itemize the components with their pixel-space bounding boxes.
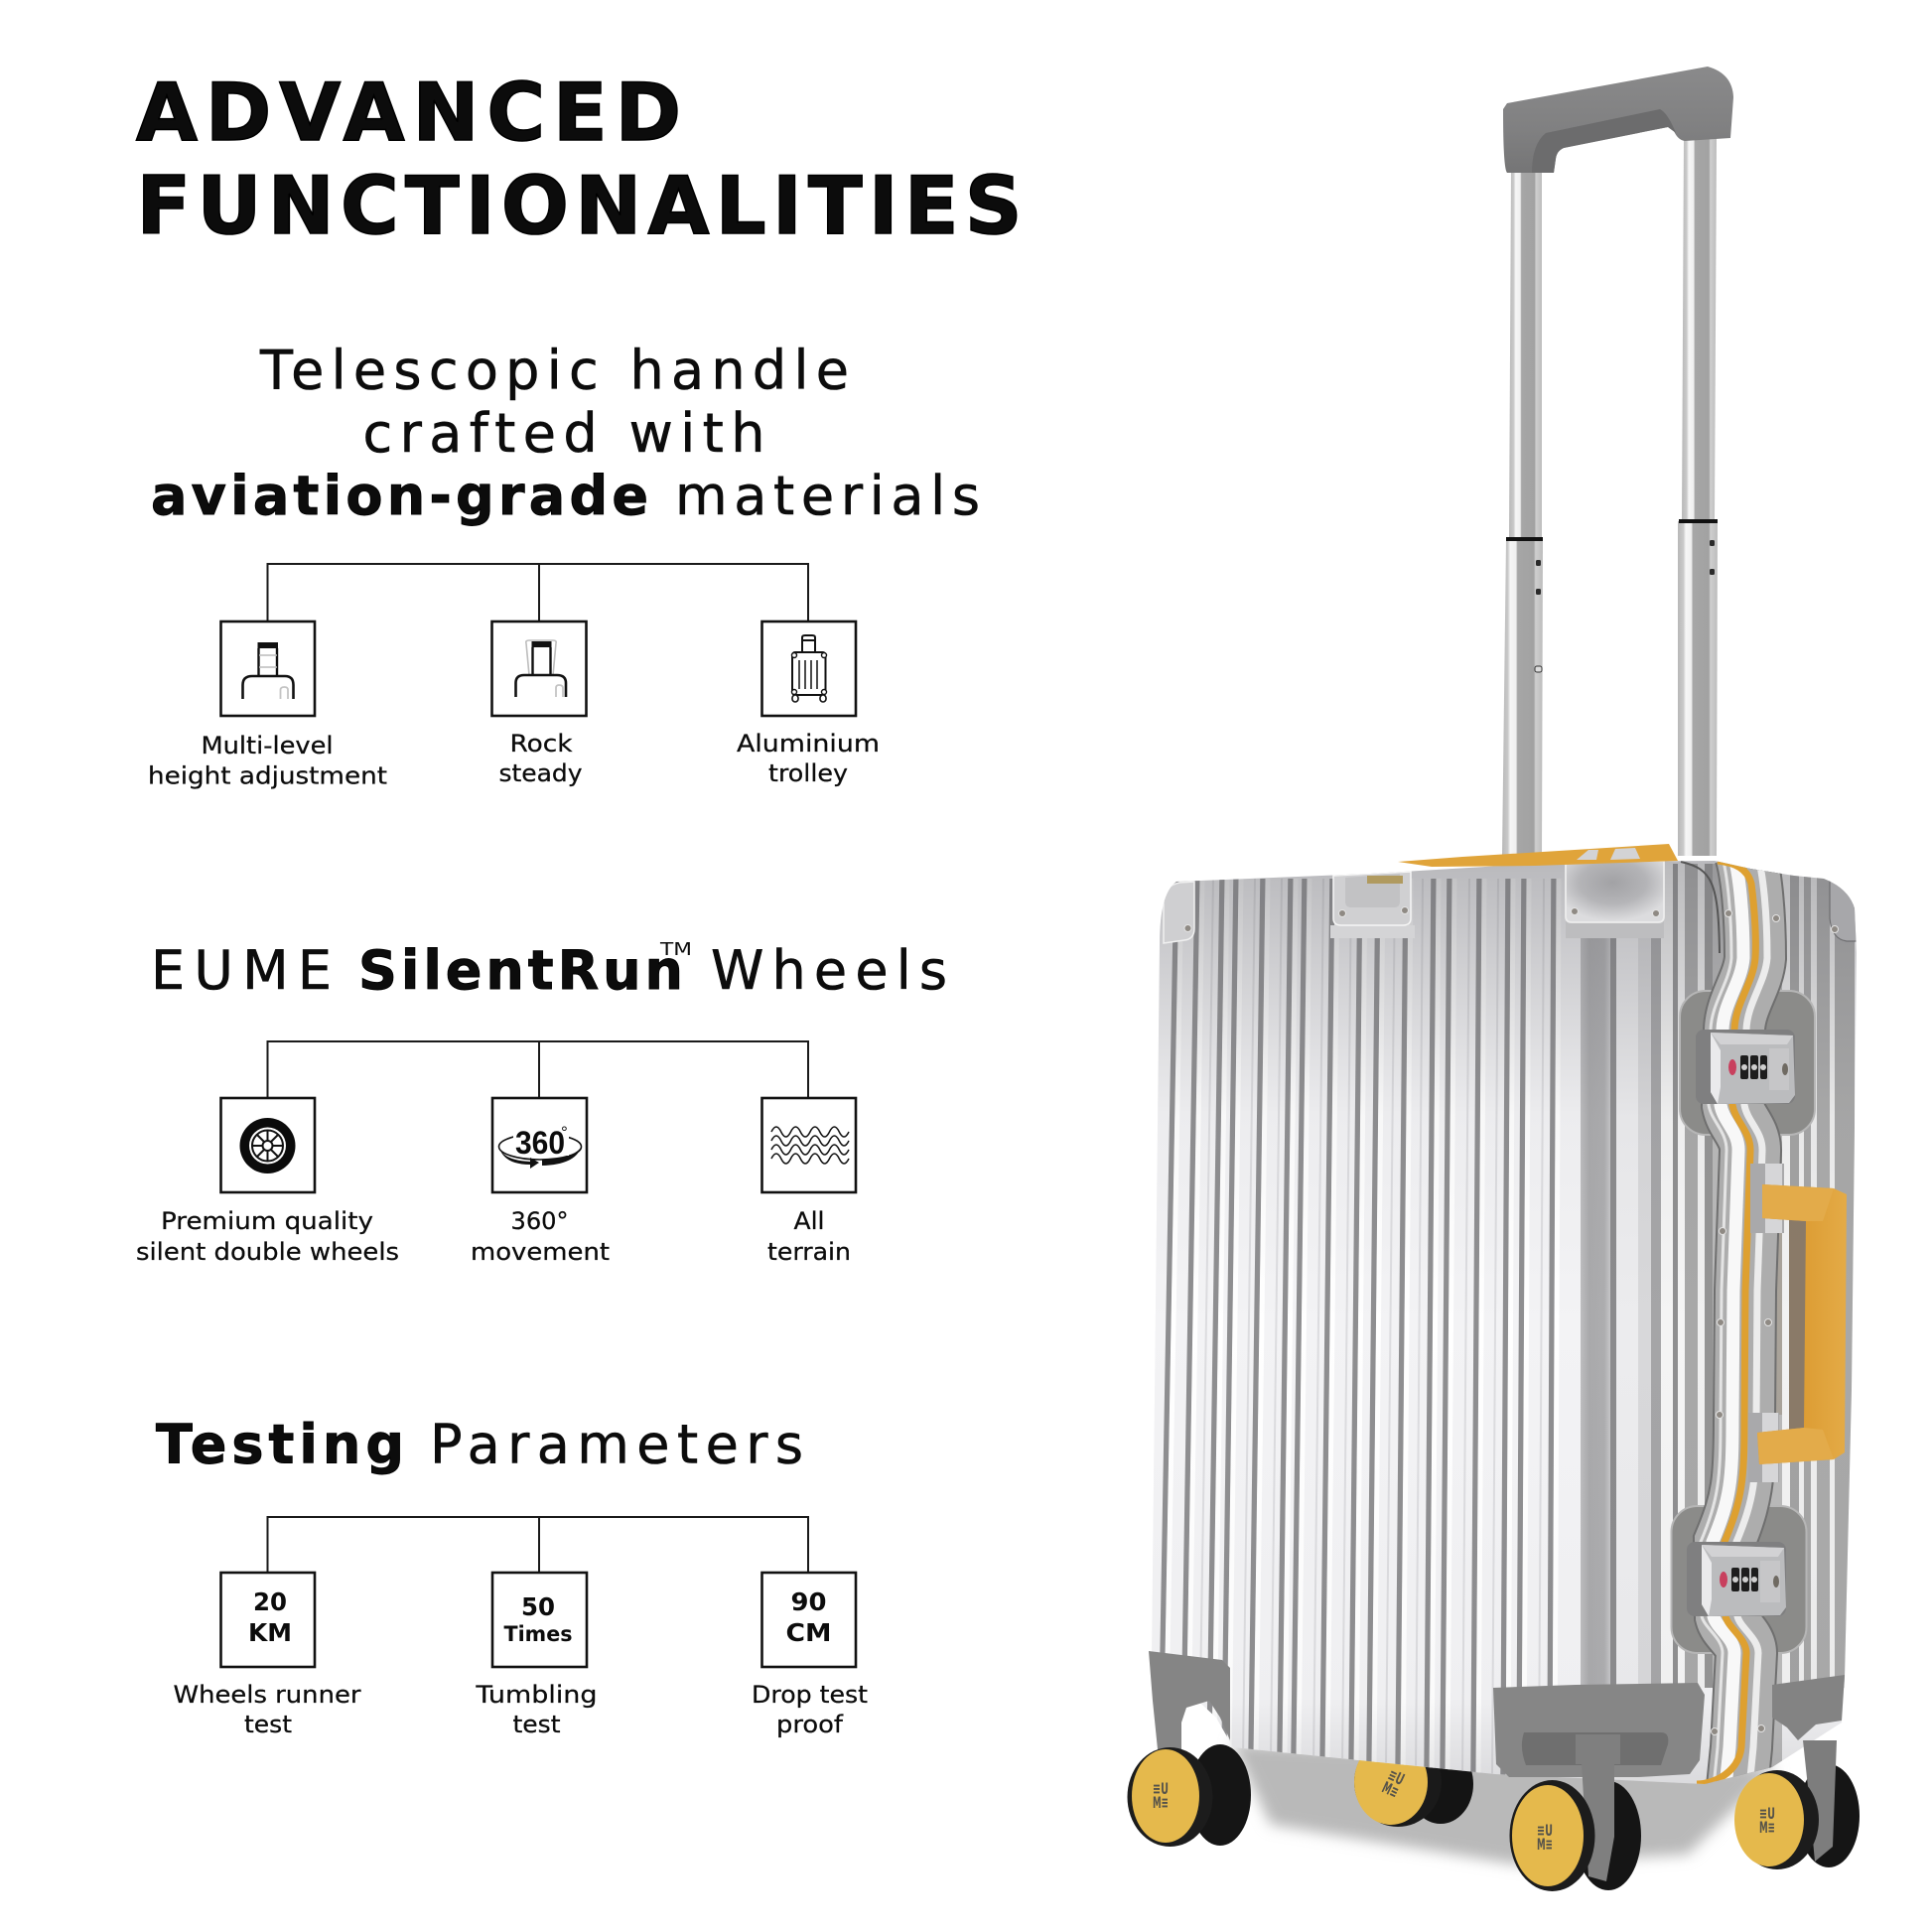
heading: telescopic handle: Telescopic handle	[259, 340, 849, 401]
label: all terrain: terrain	[767, 1238, 851, 1266]
wheel: front left: ≡U	[1153, 1779, 1169, 1798]
stat box: 50 times	[492, 1573, 587, 1667]
wheel: front left: M≡	[1153, 1793, 1169, 1812]
label: aluminium trolley	[737, 730, 880, 787]
stat box: 20 KM: 20	[253, 1587, 287, 1616]
heading: testing parameters: Parameters	[430, 1414, 803, 1475]
lock base plates	[1680, 991, 1815, 1135]
panel behind side handle	[1776, 1233, 1782, 1415]
label: tumbling test	[475, 1681, 598, 1738]
aluminium frame	[1701, 854, 1767, 1787]
title	[136, 67, 1023, 252]
front face ribs	[1163, 879, 1559, 1777]
label: multi-level height adjustment	[148, 732, 387, 790]
label: aluminium trolley: trolley	[768, 759, 848, 787]
icon: aluminium trolley	[762, 621, 856, 716]
stat box: 20 KM: KM	[248, 1618, 292, 1647]
label: premium quality silent double wheels: Premium quality	[161, 1207, 373, 1235]
panel: testing parameters	[156, 1414, 868, 1738]
label: drop test proof: proof	[776, 1711, 844, 1738]
heading: testing parameters	[156, 1414, 803, 1475]
label: 360 movement: 360°	[510, 1207, 568, 1235]
wheel: front left	[1128, 1744, 1251, 1847]
label: tumbling test: Tumbling	[475, 1681, 598, 1709]
label: aluminium trolley: Aluminium	[737, 730, 880, 758]
heading: telescopic handle: crafted with	[363, 402, 764, 465]
icon: rock steady	[492, 621, 586, 716]
icon: wheel	[220, 1098, 315, 1192]
label: premium quality silent double wheels: silent double wheels	[136, 1238, 399, 1266]
panel: telescopic handle	[148, 340, 980, 790]
label: wheels runner test: test	[244, 1711, 292, 1738]
corner cap: right	[1772, 1675, 1845, 1740]
top metal clasps	[1577, 848, 1640, 860]
wheel: right: M≡	[1759, 1818, 1775, 1837]
label: all terrain: All	[794, 1207, 824, 1235]
rivets	[1184, 907, 1839, 1735]
combination lock: lower	[1687, 1542, 1786, 1616]
label: premium quality silent double wheels	[136, 1207, 399, 1266]
top yellow strip	[1398, 844, 1678, 867]
wheel: front centre	[1509, 1734, 1641, 1891]
heading: telescopic handle: materials	[675, 465, 980, 527]
corner plates	[1164, 861, 1859, 943]
floor shadow	[1231, 1742, 1777, 1864]
icon: 360 degree	[492, 1098, 587, 1192]
title: ADVANCED	[136, 67, 681, 159]
corner cap: front	[1493, 1683, 1705, 1777]
icon: 360 degree: °	[561, 1123, 568, 1142]
corner band	[1581, 864, 1610, 1688]
back wheel	[1354, 1737, 1473, 1827]
suitcase shell	[1142, 854, 1866, 1792]
label: tumbling test: test	[512, 1711, 560, 1738]
telescopic handle poles	[1502, 137, 1718, 856]
logo plate on top latch	[1367, 876, 1403, 884]
label: all terrain	[767, 1207, 851, 1266]
frame dark edge	[1681, 862, 1720, 953]
side handle	[1748, 1164, 1847, 1482]
heading: testing parameters: Testing	[156, 1414, 404, 1475]
label: rock steady	[498, 730, 582, 787]
label: wheels runner test: Wheels runner	[173, 1681, 361, 1709]
wheel: front centre: ≡U	[1537, 1821, 1553, 1840]
wheel: front centre: M≡	[1537, 1835, 1553, 1854]
heading: silentrun wheels: EUME	[151, 939, 332, 1002]
icon: 360 degree: 360	[515, 1125, 565, 1161]
back wheel: M≡	[1379, 1778, 1402, 1802]
icon: all terrain waves	[762, 1098, 856, 1192]
stat box: 90 CM: CM	[786, 1618, 832, 1647]
connector lines	[268, 1517, 808, 1572]
heading: silentrun wheels	[151, 939, 947, 1002]
stat box: 90 CM	[762, 1573, 856, 1667]
wheel: right	[1734, 1740, 1860, 1869]
top shading	[1142, 854, 1866, 1792]
label: multi-level height adjustment: height adjustment	[148, 762, 387, 790]
side panel ribs	[1638, 864, 1855, 1768]
stat box: 90 CM: 90	[790, 1587, 826, 1616]
label: 360 movement: movement	[471, 1238, 610, 1266]
stat box: 20 KM	[220, 1573, 315, 1667]
icon: multi-level height adjustment	[220, 621, 315, 716]
title: FUNCTIONALITIES	[137, 160, 1023, 252]
connector lines	[268, 564, 808, 621]
handle grip	[1503, 67, 1733, 173]
wheel: right: ≡U	[1759, 1804, 1775, 1823]
label: rock steady: Rock	[510, 730, 573, 758]
label: drop test proof	[752, 1681, 868, 1738]
handle grip inner ridge	[1532, 109, 1676, 173]
panel: silentrun wheels	[136, 939, 947, 1266]
label: rock steady: steady	[498, 759, 582, 787]
heading: silentrun wheels: Wheels	[711, 939, 947, 1002]
yellow seam	[1697, 861, 1755, 1784]
combination lock: upper	[1696, 1030, 1795, 1104]
label: wheels runner test	[173, 1681, 361, 1738]
stat box: 50 times: 50	[521, 1592, 555, 1621]
label: 360 movement	[471, 1207, 610, 1266]
stat box: 50 times: Times	[504, 1622, 572, 1646]
heading: silentrun wheels: TM	[659, 939, 692, 960]
corner cap: left	[1149, 1651, 1230, 1749]
label: drop test proof: Drop test	[752, 1681, 868, 1709]
connector lines	[268, 1041, 808, 1098]
heading: telescopic handle	[151, 340, 980, 527]
product: aluminium suitcase	[1128, 67, 1866, 1891]
back wheel: ≡U	[1385, 1765, 1408, 1789]
label: multi-level height adjustment: Multi-level	[201, 732, 334, 759]
heading: silentrun wheels: SilentRun	[358, 939, 683, 1002]
heading: telescopic handle: aviation-grade	[151, 465, 648, 527]
